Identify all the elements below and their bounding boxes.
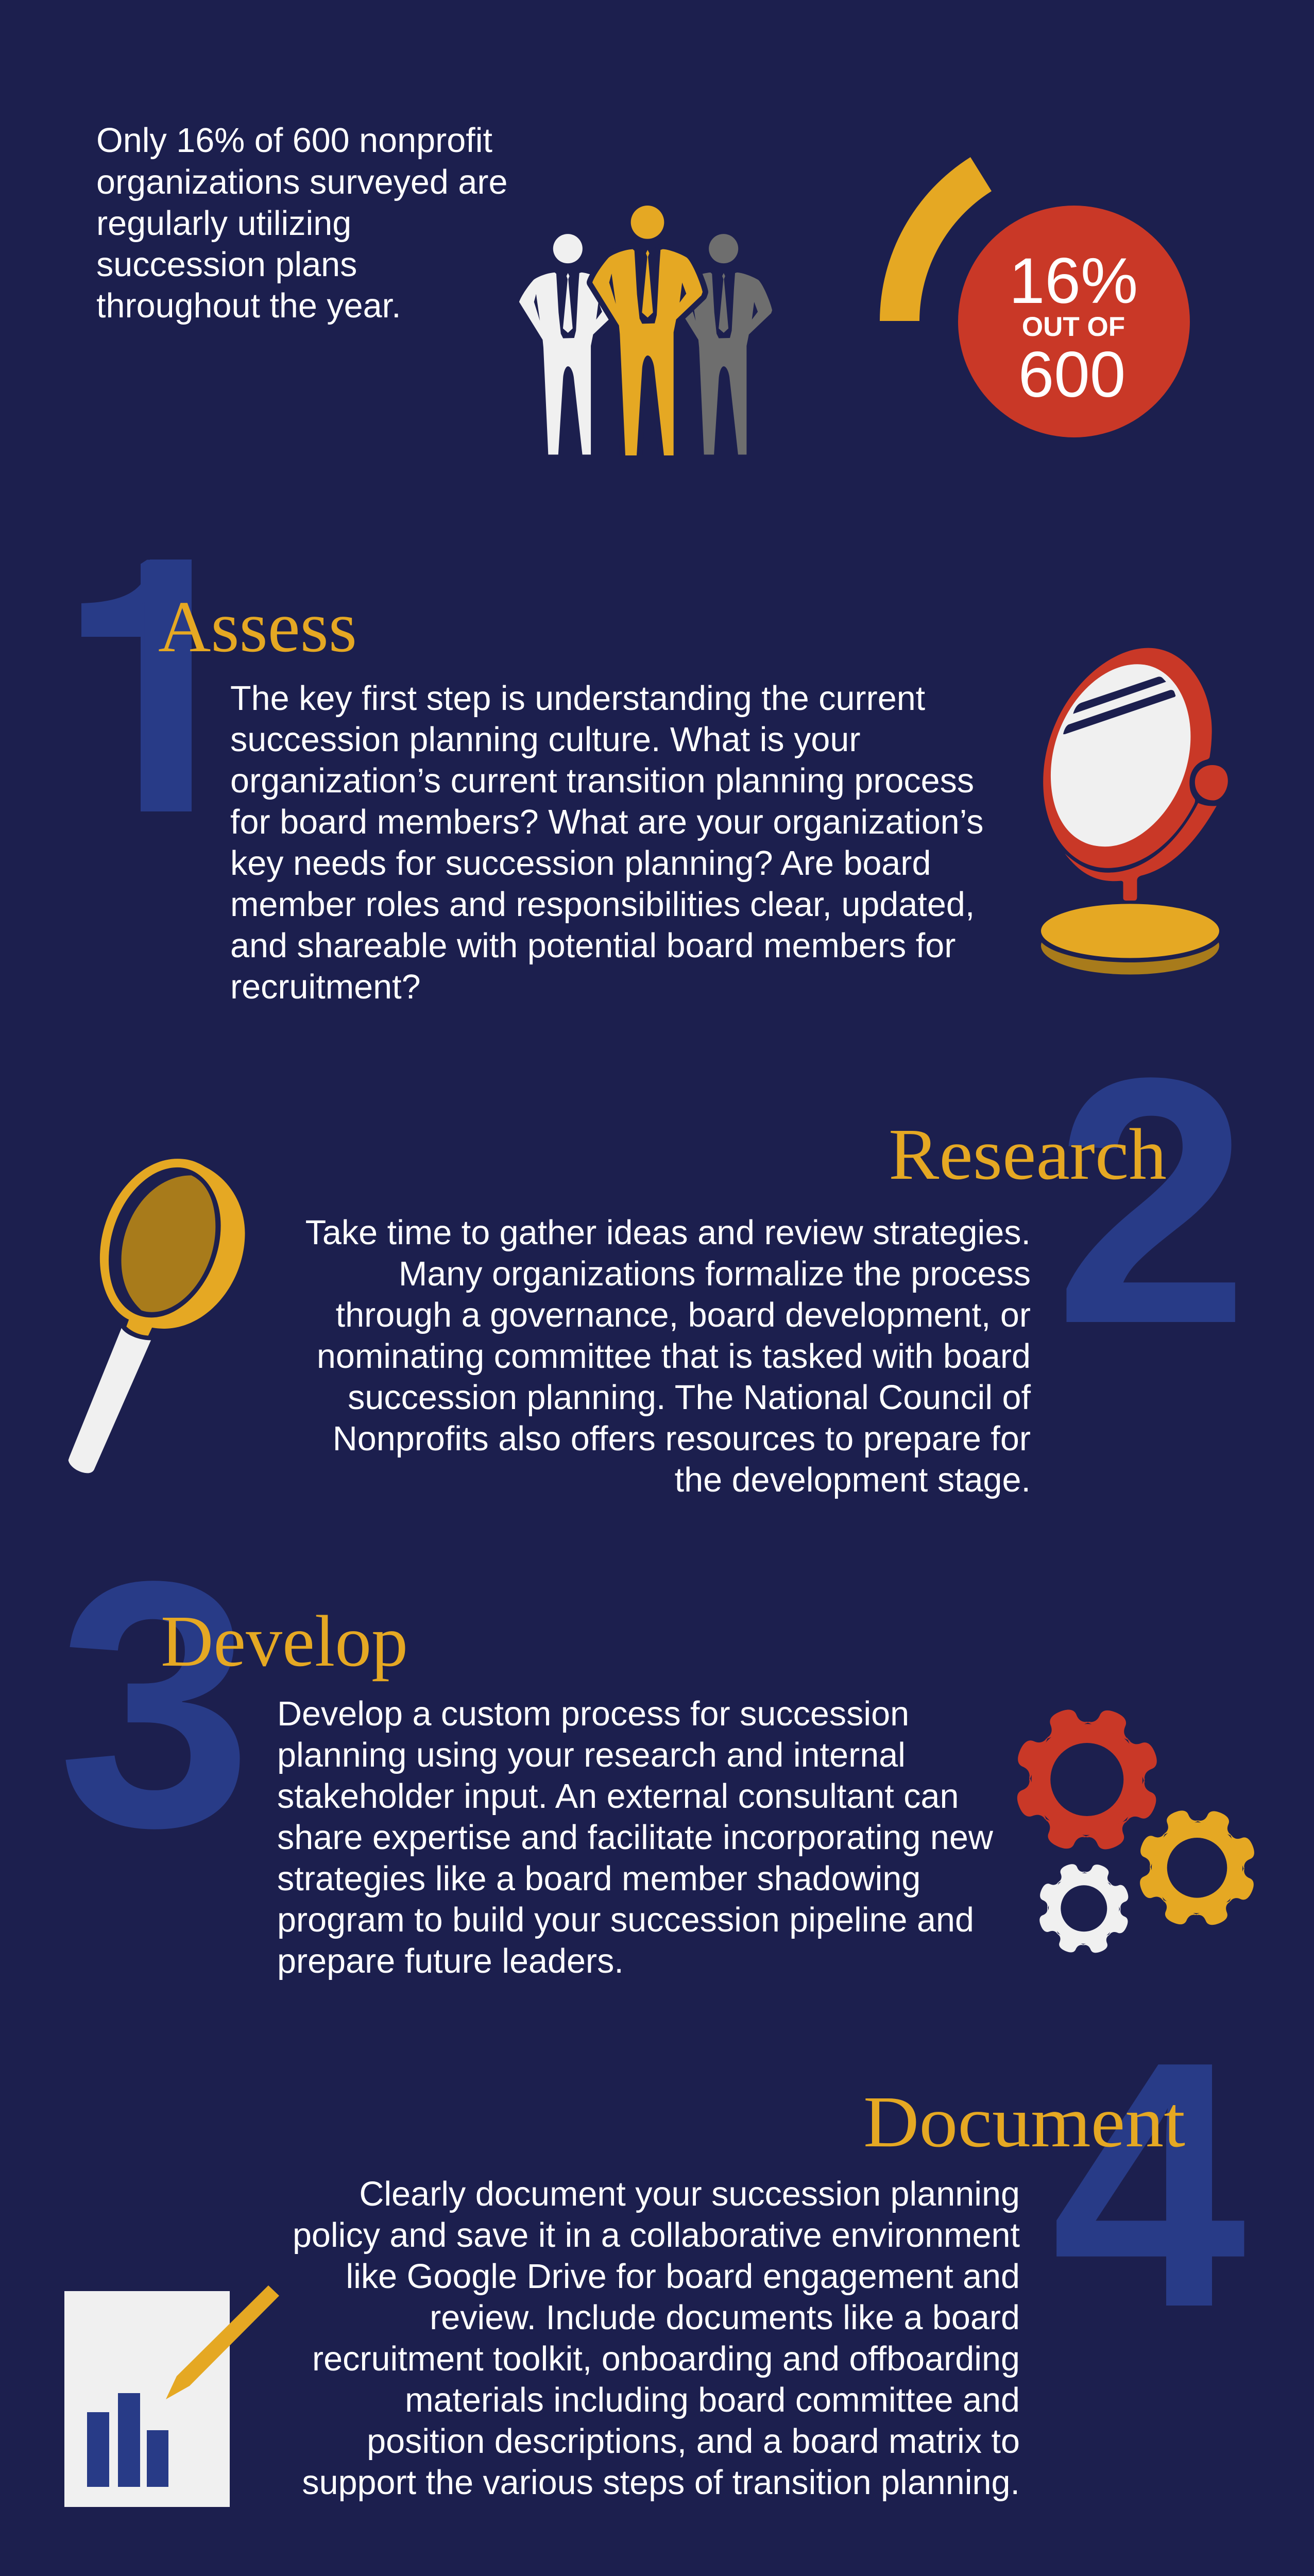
intro text: throughout the year. <box>96 287 401 325</box>
body text: member roles and responsibilities clear, updated, <box>230 886 975 924</box>
body text: the development stage. <box>675 1461 1031 1499</box>
number 1 <box>81 560 192 811</box>
number 1: 1 <box>59 481 262 889</box>
intro text: organizations surveyed are <box>96 163 507 201</box>
number 4: 4 <box>1051 1989 1248 2380</box>
body text: like Google Drive for board engagement and <box>346 2258 1020 2296</box>
icon: document with chart and pencil <box>64 2285 279 2507</box>
body text: planning using your research and internal <box>277 1736 906 1774</box>
body text: for board members? What are your organization’s <box>230 803 983 841</box>
intro text: Only 16% of 600 nonprofit <box>96 122 492 160</box>
red stat circle: 600 <box>1018 339 1125 411</box>
intro text: succession plans <box>96 246 357 284</box>
body text: program to build your succession pipeline and <box>277 1901 974 1939</box>
body text: review. Include documents like a board <box>430 2299 1020 2337</box>
icon: magnifying glass <box>69 1159 245 1473</box>
body text: organization’s current transition planning process <box>230 762 974 800</box>
icon: gears <box>1010 1703 1260 1957</box>
body text: The key first step is understanding the current <box>230 680 925 718</box>
body text: and shareable with potential board members for <box>230 927 955 965</box>
body text: Take time to gather ideas and review strategies. <box>305 1214 1031 1252</box>
body text: key needs for succession planning? Are board <box>230 844 931 883</box>
number 2: 2 <box>1054 1005 1249 1397</box>
panel: step 1 assess <box>59 481 1228 1006</box>
body text: recruitment? <box>230 968 421 1006</box>
red stat circle: 16% <box>1009 245 1138 317</box>
panel: step 2 research <box>69 1005 1249 1499</box>
progress arc <box>880 157 992 321</box>
body text: succession planning culture. What is your <box>230 721 860 759</box>
heading: assess: Assess <box>158 586 357 667</box>
heading: research: Research <box>889 1113 1167 1195</box>
body text: through a governance, board development, or <box>336 1296 1031 1334</box>
heading: develop: Develop <box>161 1600 408 1682</box>
body text: materials including board committee and <box>405 2381 1020 2419</box>
body text: recruitment toolkit, onboarding and offboarding <box>312 2340 1020 2378</box>
icon: yellow person <box>592 206 703 455</box>
body text: Clearly document your succession planning <box>359 2175 1020 2213</box>
panel: intro statistic <box>96 122 1190 455</box>
body text: prepare future leaders. <box>277 1942 624 1980</box>
panel: step 3 develop <box>58 1509 1260 1980</box>
icon: grey person <box>675 234 772 454</box>
icon: white person <box>519 234 617 454</box>
icon: mirror <box>1038 648 1228 975</box>
body text: Many organizations formalize the process <box>399 1255 1031 1293</box>
red stat circle: OUT OF <box>1022 312 1125 342</box>
body text: policy and save it in a collaborative environment <box>293 2216 1020 2255</box>
panel: step 4 document <box>64 1989 1248 2507</box>
body text: Nonprofits also offers resources to prepare for <box>333 1420 1031 1458</box>
number 3: 3 <box>58 1509 252 1900</box>
icon: three business people <box>519 206 772 455</box>
body text: stakeholder input. An external consultant can <box>277 1777 959 1816</box>
body text: position descriptions, and a board matrix to <box>367 2422 1020 2461</box>
body text: nominating committee that is tasked with board <box>317 1337 1031 1376</box>
intro text: regularly utilizing <box>96 205 351 243</box>
body text: Develop a custom process for succession <box>277 1695 909 1733</box>
body text: strategies like a board member shadowing <box>277 1860 920 1898</box>
body text: support the various steps of transition planning. <box>302 2464 1020 2502</box>
body text: share expertise and facilitate incorporating new <box>277 1819 994 1857</box>
red stat circle <box>958 206 1190 437</box>
body text: succession planning. The National Council of <box>348 1379 1031 1417</box>
heading: document: Document <box>863 2081 1185 2162</box>
